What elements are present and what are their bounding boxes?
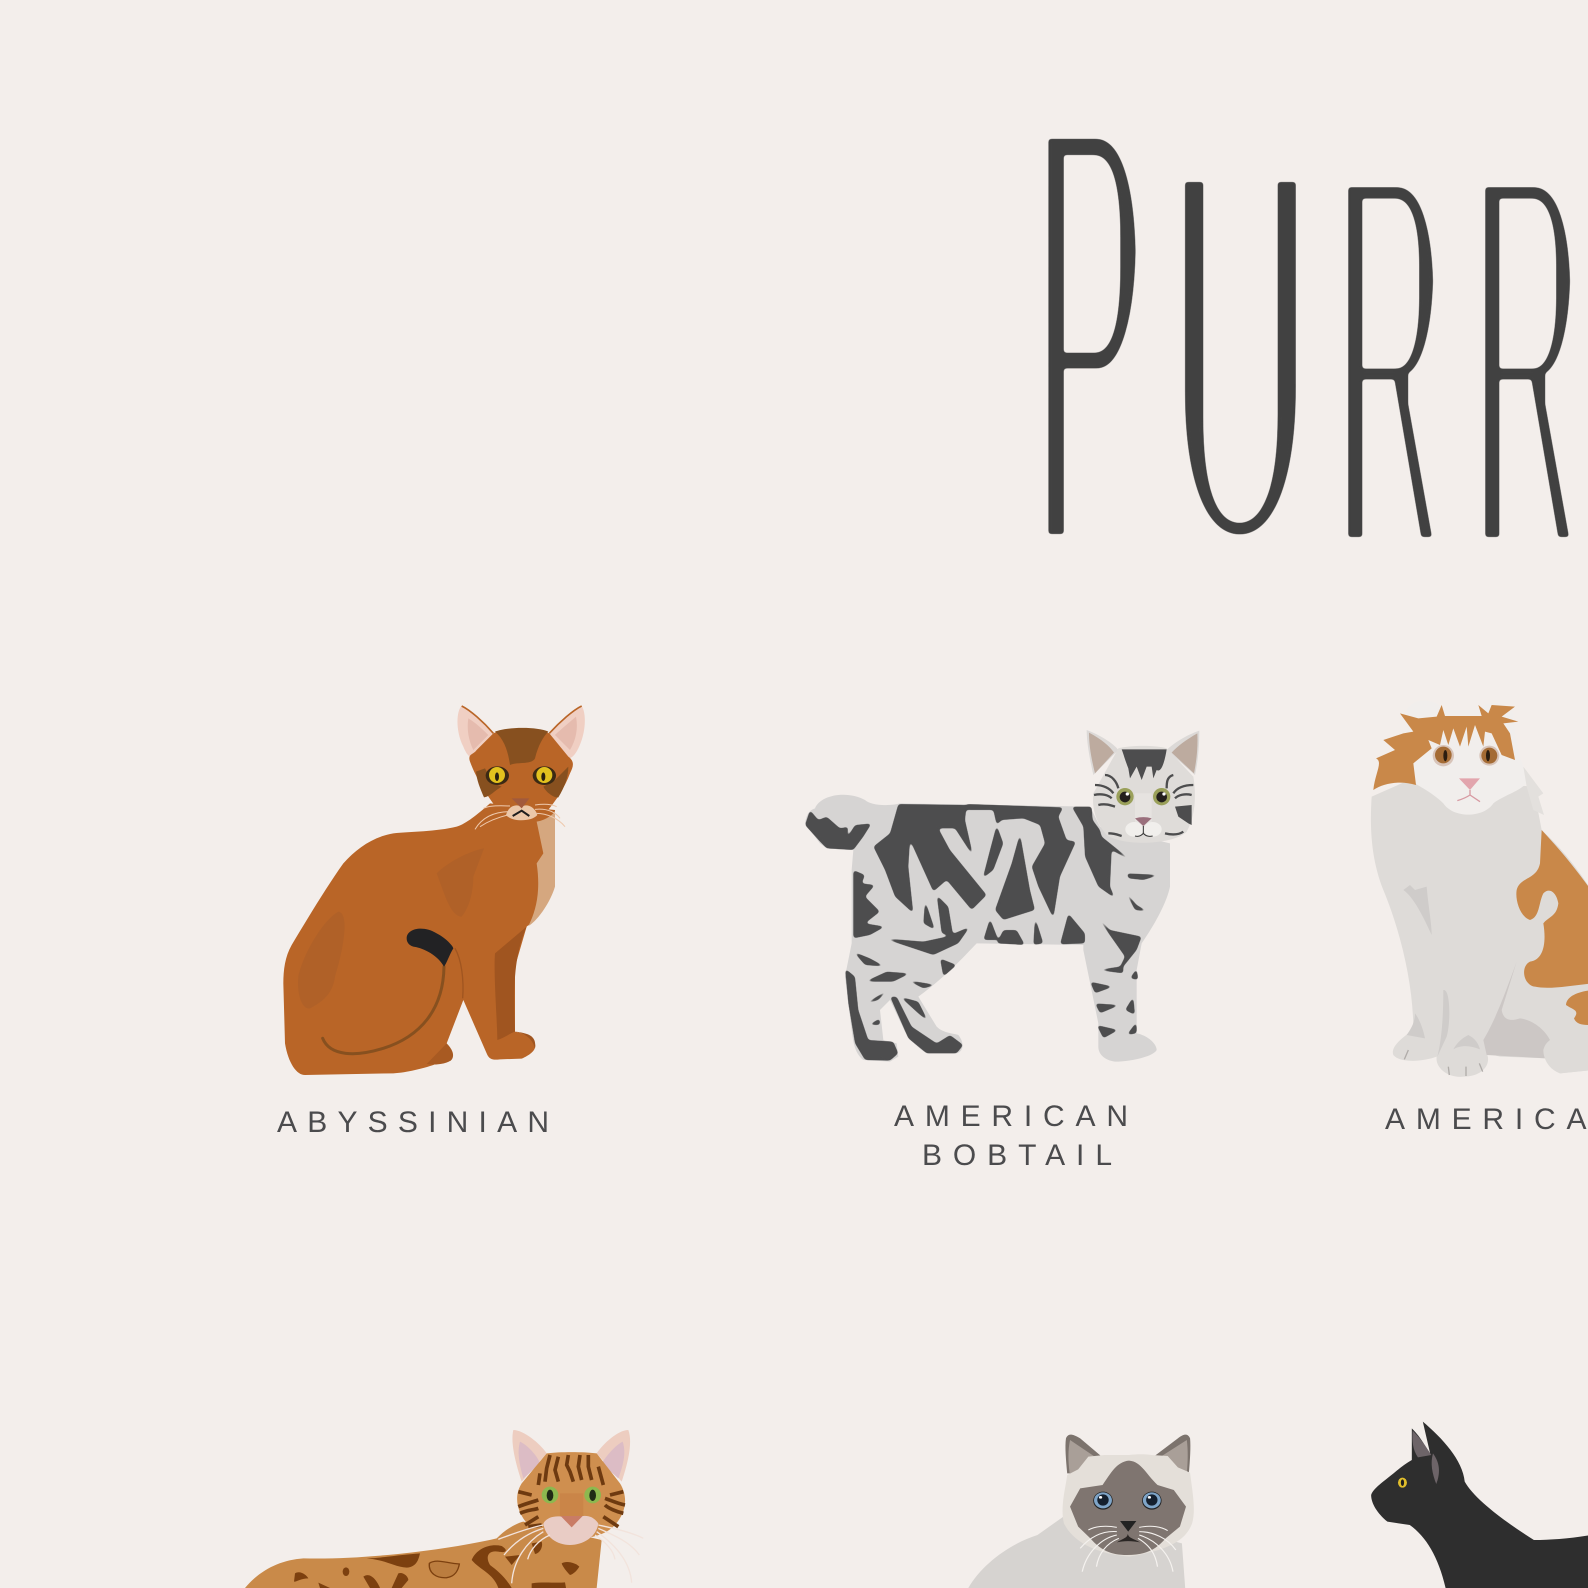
chest mark bbox=[1403, 885, 1432, 935]
chest bbox=[528, 810, 555, 926]
ear inner bbox=[1412, 1431, 1431, 1457]
body bbox=[1371, 777, 1588, 1077]
front leg shade bbox=[495, 927, 535, 1048]
cat: bengal bbox=[245, 1430, 643, 1588]
body bbox=[968, 1513, 1185, 1588]
head bbox=[1407, 701, 1530, 815]
ears bbox=[1087, 730, 1118, 775]
title: P bbox=[1035, 0, 1144, 680]
nose bridge bbox=[560, 1493, 583, 1517]
label: american bobtail bbox=[894, 1100, 1128, 1172]
toe lines bbox=[1404, 1050, 1483, 1076]
cat: black bbox=[1371, 1422, 1588, 1588]
eyes bbox=[1093, 1492, 1113, 1510]
nose and mouth bbox=[1459, 778, 1480, 790]
cat: american bobtail bbox=[805, 730, 1199, 1062]
label: abyssinian: ABYSSINIAN bbox=[277, 1106, 549, 1139]
cat: abyssinian bbox=[283, 706, 585, 1075]
eyes bbox=[542, 1487, 558, 1503]
body bbox=[283, 803, 555, 1075]
ears bbox=[1065, 1435, 1104, 1473]
tail tip bbox=[407, 929, 453, 967]
hind foot bbox=[427, 1043, 453, 1065]
face mask bbox=[1070, 1461, 1186, 1555]
eyes bbox=[1433, 745, 1454, 766]
muzzle bbox=[506, 805, 537, 820]
muzzle bbox=[1135, 793, 1152, 823]
back orange patch bbox=[1516, 830, 1588, 988]
eyes bbox=[486, 766, 509, 785]
whiskers bbox=[1080, 1526, 1176, 1572]
label: american bobtail: AMERICAN bbox=[894, 1100, 1128, 1133]
nose and mouth bbox=[1120, 1521, 1136, 1532]
orange mantle bbox=[1373, 705, 1518, 790]
lower orange patch bbox=[1566, 990, 1588, 1025]
title bbox=[1035, 0, 1581, 680]
whiskers bbox=[498, 1525, 643, 1583]
shoulder patch bbox=[437, 848, 484, 917]
ruff bbox=[1523, 767, 1544, 815]
label: american bobtail: BOBTAIL bbox=[922, 1139, 1112, 1172]
title: U bbox=[1170, 50, 1311, 661]
tabby stripes bbox=[805, 804, 1160, 1061]
cat: birman bbox=[968, 1435, 1194, 1588]
ears bbox=[457, 706, 493, 757]
body bbox=[1371, 1422, 1588, 1588]
forehead stripes bbox=[518, 1455, 625, 1527]
eyes bbox=[1116, 788, 1134, 805]
body bbox=[245, 1522, 602, 1588]
eye bbox=[1398, 1478, 1407, 1488]
muzzle bbox=[543, 1516, 598, 1545]
whiskers bbox=[475, 804, 565, 829]
rosette bbox=[429, 1561, 459, 1578]
leg shade bbox=[1437, 990, 1449, 1057]
ruff bbox=[1063, 1454, 1194, 1557]
head bbox=[469, 728, 573, 819]
hind paw bbox=[1543, 1035, 1588, 1073]
tail bbox=[323, 967, 444, 1054]
cat: american curl bbox=[1371, 701, 1588, 1077]
ears bbox=[512, 1430, 547, 1482]
title: R bbox=[1473, 53, 1581, 669]
head bbox=[517, 1452, 625, 1539]
haunch shade bbox=[1483, 962, 1550, 1058]
head bbox=[1093, 746, 1195, 843]
title: R bbox=[1336, 53, 1444, 669]
hip patch bbox=[298, 912, 345, 1008]
spots bbox=[294, 1542, 579, 1588]
body bbox=[805, 795, 1170, 1062]
